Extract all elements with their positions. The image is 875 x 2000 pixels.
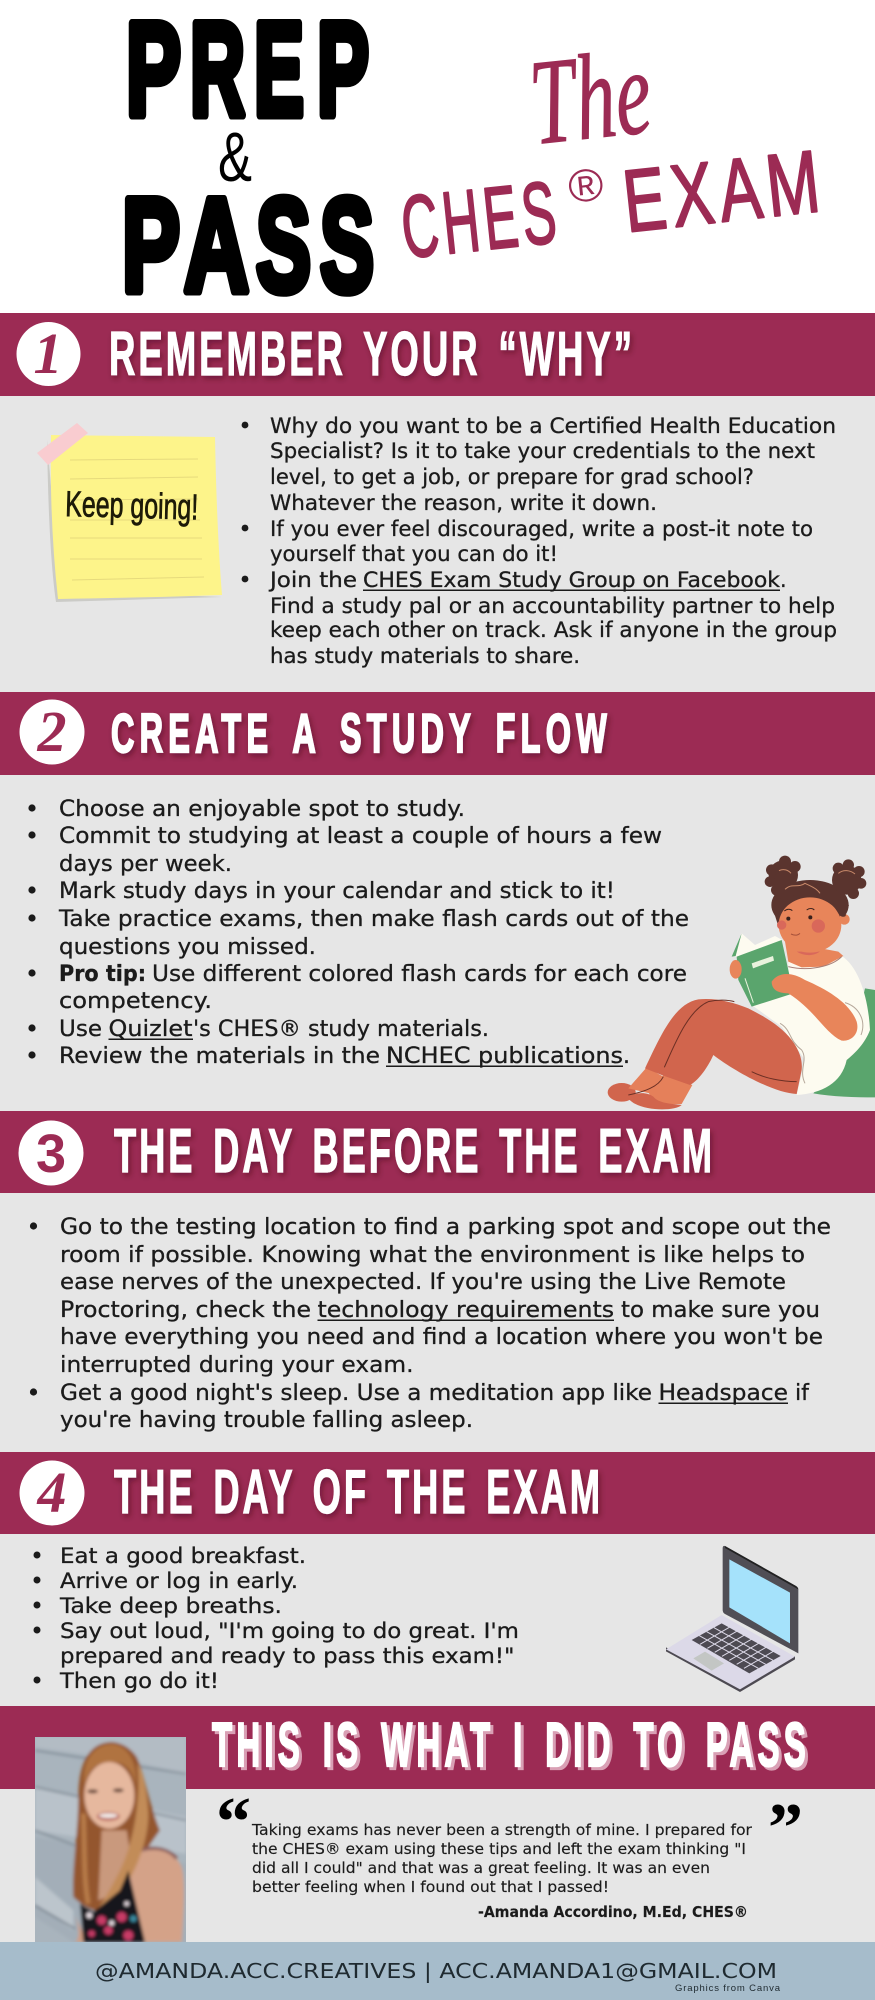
title: PREP & PASS — [122, 0, 374, 320]
section 2 bullet list: Use different colored flash cards for each core — [152, 962, 687, 987]
book — [734, 933, 782, 957]
section 2 header band: 2 — [36, 699, 66, 764]
section 2 bullet list: Review the materials in the — [59, 1044, 380, 1069]
section 2 bullet list: . — [623, 1044, 630, 1069]
footer band: @AMANDA.ACC.CREATIVES | ACC.AMANDA1@GMAIL.COM — [95, 1959, 777, 1983]
testimonial text — [251, 1821, 753, 1921]
title: PREP & PASS: P — [317, 0, 369, 144]
neck — [785, 942, 843, 967]
section 2 bullet list: Commit to studying at least a couple of hours a few — [59, 824, 662, 849]
title: PREP & PASS: S — [256, 172, 311, 320]
section 3 bullet list: have everything you need and find a location where you won't be — [60, 1325, 823, 1350]
section 2 bullet list: Quizlet — [108, 1017, 193, 1042]
illustration: girl reading a book — [608, 856, 875, 1109]
section 1 bullet list: . — [780, 568, 787, 592]
section 2 bullet list: questions you missed. — [59, 935, 316, 960]
section 3 bullet list: if — [795, 1381, 810, 1406]
section 1 bullet list: yourself that you can do it! — [270, 542, 558, 566]
section 5 header band — [0, 1706, 875, 1789]
shirt — [752, 956, 870, 1095]
testimonial text: did all I could" and that was a great feeling. It was an even — [252, 1859, 710, 1877]
section 1 header band: 1 — [34, 321, 62, 386]
title: PREP & PASS: P — [122, 172, 180, 320]
section 2 bullet list: competency. — [59, 989, 212, 1014]
title: PREP & PASS: E — [254, 0, 304, 144]
pants — [645, 999, 802, 1094]
cushion — [813, 988, 875, 1097]
section 4 bullet list: Arrive or log in early. — [60, 1569, 298, 1593]
section 1 bullet list: Specialist? Is it to take your credentials to the next — [270, 439, 815, 463]
photo: Amanda Accordino — [35, 1737, 186, 1942]
section 2 bullet list — [28, 797, 689, 1069]
subtitle: The CHES Exam: CHES — [397, 162, 565, 277]
section 4 bullet list: Take deep breaths. — [59, 1594, 282, 1618]
subtitle: The CHES Exam: The — [524, 24, 657, 171]
section 3 bullet list: Get a good night's sleep. Use a meditation app like — [60, 1381, 652, 1406]
testimonial text: -Amanda Accordino, M.Ed, CHES® — [478, 1903, 748, 1921]
section 3 bullet list: Go to the testing location to find a parking spot and scope out the — [60, 1215, 831, 1240]
section 4 bullet list — [34, 1544, 519, 1693]
section 1 bullet list: Whatever the reason, write it down. — [270, 491, 657, 515]
section 1 bullet list — [242, 414, 837, 668]
footer band — [0, 1942, 875, 2000]
section 3 bullet list: technology requirements — [318, 1298, 614, 1323]
section 1 bullet list: has study materials to share. — [270, 644, 580, 668]
section 2 bullet list: Choose an enjoyable spot to study. — [59, 797, 465, 822]
testimonial text: better feeling when I found out that I passed! — [252, 1878, 609, 1896]
section 1 bullet list: Find a study pal or an accountability partner to help — [270, 594, 835, 618]
section 2 bullet list: Pro tip: — [59, 962, 146, 987]
section 2 bullet list: Use — [59, 1017, 102, 1042]
face — [779, 897, 841, 953]
section 3 bullet list: Proctoring, check the — [60, 1298, 311, 1323]
section 2 bullet list: Take practice exams, then make flash cards out of the — [58, 907, 689, 932]
section 1 bullet list: keep each other on track. Ask if anyone in the group — [270, 618, 837, 642]
footer band: Graphics from Canva — [675, 1983, 781, 1994]
title: PREP & PASS: S — [320, 172, 374, 320]
section 1 bullet list: level, to get a job, or prepare for grad school? — [270, 465, 754, 489]
section 1 bullet list: CHES Exam Study Group on Facebook — [363, 568, 781, 592]
section 2 header band — [0, 692, 875, 775]
section 3 bullet list: you're having trouble falling asleep. — [60, 1408, 473, 1433]
icon: sticky note — [37, 423, 222, 602]
subtitle: The CHES Exam: ® — [566, 158, 606, 213]
section 2 bullet list: days per week. — [59, 852, 232, 877]
icon: opening quote mark: “ — [216, 1784, 251, 1861]
title: PREP & PASS: A — [184, 172, 249, 320]
title: PREP & PASS: P — [126, 0, 181, 144]
section 4 header band: 4 — [36, 1460, 66, 1525]
section 3 header band: 3 — [36, 1124, 66, 1184]
section 3 bullet list: ease nerves of the unexpected. If you're using the Live Remote — [60, 1270, 786, 1295]
section 2 bullet list: 's CHES® study materials. — [193, 1017, 489, 1042]
section 1 bullet list: Join the — [268, 568, 357, 592]
section 3 bullet list: interrupted during your exam. — [60, 1353, 414, 1378]
feet — [608, 1083, 636, 1102]
hands and arm — [730, 960, 742, 979]
icon: sticky note: Keep going! — [65, 483, 199, 527]
section 2 bullet list: Mark study days in your calendar and stick to it! — [59, 879, 615, 904]
hair — [765, 856, 866, 930]
title: PREP & PASS: R — [190, 0, 245, 144]
section 4 bullet list: Then go do it! — [59, 1669, 219, 1693]
subtitle: The CHES Exam — [397, 24, 830, 277]
section 1 bullet list: Why do you want to be a Certified Health Education — [270, 414, 836, 438]
icon: laptop — [666, 1546, 798, 1692]
ear — [839, 914, 850, 925]
title: PREP & PASS: & — [218, 118, 252, 196]
section 2 bullet list: NCHEC publications — [386, 1044, 623, 1069]
section 3 bullet list: room if possible. Knowing what the environment is like helps to — [60, 1243, 805, 1268]
section 4 bullet list: prepared and ready to pass this exam!" — [60, 1644, 514, 1668]
testimonial text: the CHES® exam using these tips and left the exam thinking "I — [252, 1840, 746, 1858]
section 4 bullet list: Eat a good breakfast. — [60, 1544, 306, 1568]
testimonial text: Taking exams has never been a strength of mine. I prepared for — [251, 1821, 753, 1839]
section 4 bullet list: Say out loud, "I'm going to do great. I'm — [60, 1619, 519, 1643]
section 1 bullet list: If you ever feel discouraged, write a post-it note to — [270, 517, 813, 541]
section 3 bullet list — [30, 1215, 831, 1433]
section 3 bullet list: Headspace — [658, 1381, 788, 1406]
section 3 bullet list: to make sure you — [621, 1298, 820, 1323]
icon: closing quote mark: ” — [768, 1790, 803, 1867]
